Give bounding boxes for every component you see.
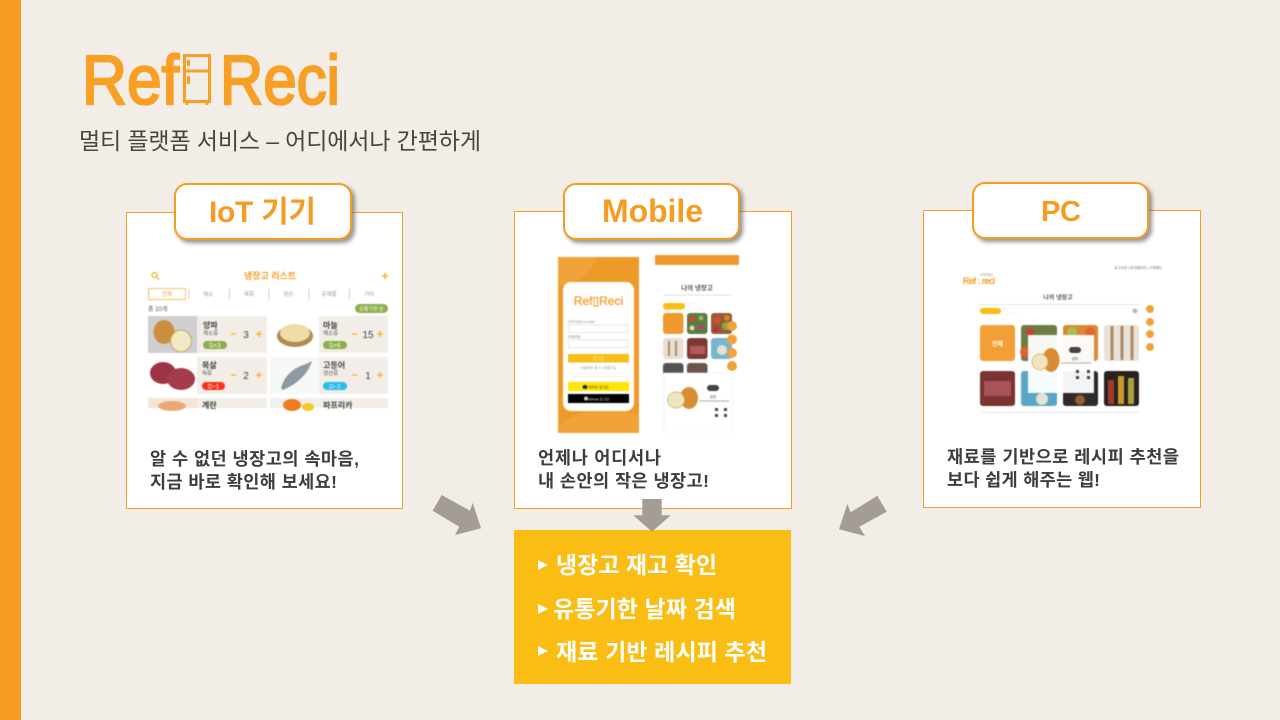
PC description: 보다 쉽게 해주는 웹!: [947, 470, 1100, 490]
IoT app screenshot: 채소: [203, 290, 213, 298]
feature: recipe recommendation: 재료 기반 레시피 추천: [556, 639, 767, 665]
food card: garlic: [270, 316, 388, 353]
mobile login screenshot: 아이디(ID)·e-mail: [568, 319, 594, 324]
arrow: Mobile to features: [633, 499, 671, 532]
IoT app screenshot: 냉장고 리스트: [244, 270, 296, 281]
mobile login screenshot: GitHub 로그인: [588, 396, 609, 402]
IoT app screenshot: 기타: [364, 290, 374, 298]
food card: onion: 양파: [203, 320, 218, 330]
PC description: [947, 447, 1179, 490]
side buttons: [727, 321, 737, 371]
mobile login screenshot: 비밀번호: [568, 334, 582, 339]
mobile login screenshot: 비밀번호 찾기 | 회원가입: [580, 365, 617, 370]
food card: mackerel: [270, 357, 388, 394]
Mobile tab: Mobile: [602, 193, 703, 229]
food card: paprika: 파프리카: [323, 400, 353, 410]
PC web screenshot: 리프레시: [980, 272, 993, 277]
icon: search: [152, 272, 159, 280]
PC web screenshot: 나의 냉장고: [1043, 294, 1073, 302]
ingredient modal: [1028, 335, 1094, 393]
ingredient modal: 양파: [1072, 356, 1079, 361]
IoT description: 알 수 없던 냉장고의 속마음,: [150, 449, 359, 469]
mobile login screenshot: [558, 257, 639, 433]
food card: beef: 2: [243, 371, 249, 382]
IoT description: 지금 바로 확인해 보세요!: [150, 472, 337, 492]
mobile login screenshot: 카카오 로그인: [588, 384, 609, 390]
logo: Ref: [82, 41, 179, 119]
IoT app screenshot: 전체: [162, 290, 172, 298]
food card: mackerel: 고등어: [323, 360, 345, 370]
food card: garlic: D+6: [329, 344, 341, 350]
PC tab: PC: [1041, 196, 1081, 228]
Mobile description: 내 손안의 작은 냉장고!: [538, 471, 709, 491]
food card: onion: 3: [243, 330, 249, 341]
food card: beef: 목살: [202, 360, 217, 370]
logo: Reci: [220, 41, 340, 119]
left accent bar: [0, 0, 21, 720]
food card: garlic: 15: [362, 330, 374, 341]
Mobile description: 언제나 어디서나: [538, 448, 661, 468]
IoT app screenshot: 생선: [283, 290, 293, 298]
feature box: [514, 530, 791, 684]
Mobile description: [538, 448, 709, 491]
arrow: PC to features: [839, 496, 887, 536]
food card: garlic: 마늘: [323, 320, 338, 330]
IoT description: [150, 449, 359, 492]
feature: stock check: 냉장고 재고 확인: [556, 552, 717, 578]
ingredient grid: 전체: [992, 340, 1003, 348]
ingredient grid: [980, 325, 1139, 406]
food card: paprika: [270, 398, 388, 411]
food card: beef: 육류: [202, 370, 212, 377]
feature: expiry search: 유통기한 날짜 검색: [553, 596, 736, 622]
Mobile tab: [564, 184, 739, 239]
ingredient modal: 양파: [710, 394, 717, 399]
ingredient modal: [664, 373, 733, 432]
panel: IoT: [126, 184, 402, 508]
PC web screenshot: [963, 265, 1162, 412]
mobile login screenshot: 로그인: [593, 355, 604, 361]
PC web screenshot: 로그아웃 | 마이페이지 | 고객센터: [1114, 265, 1162, 270]
food card: garlic: 채소류: [323, 329, 338, 337]
side buttons: [1146, 305, 1154, 351]
mobile fridge screenshot: [655, 255, 739, 432]
PC web screenshot: Ref : reci: [963, 276, 995, 286]
ingredient tiles: [663, 313, 732, 375]
subtitle: 멀티 플랫폼 서비스 – 어디에서나 간편하게: [79, 128, 481, 154]
PC tab: [973, 183, 1148, 238]
IoT app screenshot: 육류: [244, 291, 254, 298]
mobile fridge screenshot: 나의 냉장고: [681, 283, 713, 292]
IoT app screenshot: [148, 270, 388, 411]
IoT app screenshot: 유통기한 순: [359, 306, 384, 312]
food card: mackerel: 생선류: [323, 369, 338, 377]
food card: beef: D−1: [208, 384, 220, 390]
food card: egg: 계란: [202, 400, 217, 410]
logo: [82, 41, 340, 119]
food card: egg: [148, 398, 267, 411]
food card: mackerel: D−2: [329, 384, 341, 390]
arrow: IoT to features: [433, 495, 481, 535]
food card: onion: [148, 316, 267, 353]
IoT tab: [175, 184, 351, 239]
food card: onion: 채소류: [203, 329, 218, 337]
food card: beef: [148, 357, 267, 394]
panel: Mobile: [514, 184, 792, 508]
PC description: 재료를 기반으로 레시피 추천을: [947, 447, 1179, 467]
icon: refrigerator: [184, 56, 210, 105]
mobile login screenshot: Ref▯Reci: [574, 294, 623, 308]
food card: onion: D+3: [209, 344, 221, 350]
IoT app screenshot: 총 10개: [148, 305, 167, 313]
IoT app screenshot: 유제품: [321, 290, 337, 298]
panel: PC: [924, 183, 1200, 508]
IoT tab: IoT 기기: [209, 196, 316, 229]
food card: mackerel: 1: [365, 371, 371, 382]
